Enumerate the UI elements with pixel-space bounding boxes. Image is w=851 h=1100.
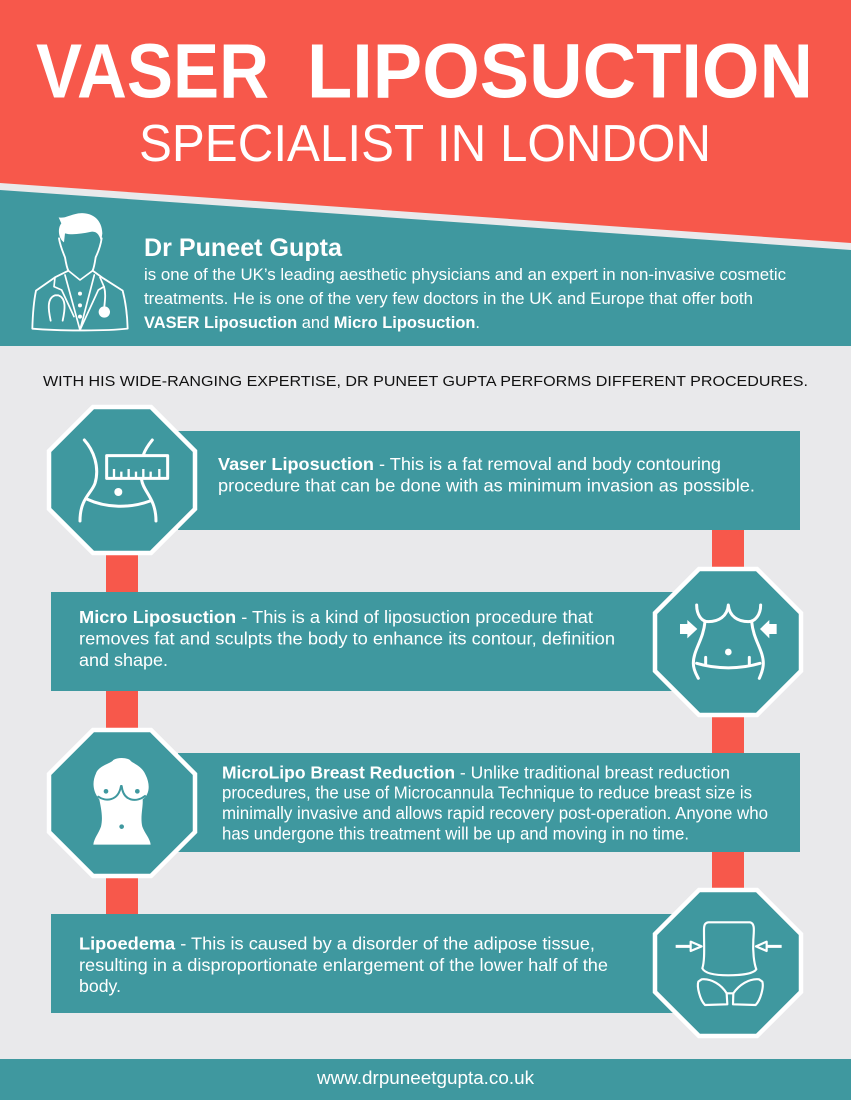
header banner [0,0,851,243]
icon: doctor [32,213,128,330]
text: Micro Liposuction: Micro Liposuction - This is a kind of liposuction procedure that [79,607,593,627]
text: MicroLipo Breast Reduction: MicroLipo Breast Reduction - Unlike traditional breast reduction [222,762,730,782]
icon: torso with arrows [655,569,801,715]
website address: www.drpuneetgupta.co.uk [316,1067,535,1088]
doctor name: Dr Puneet Gupta [144,234,343,262]
text: Micro Liposuction: and shape. [79,650,168,670]
title: VASER [36,28,269,114]
icon: waist with ruler [49,407,195,553]
subtitle: SPECIALIST IN LONDON [139,115,711,173]
panel: doctor introduction [0,190,851,346]
text: MicroLipo Breast Reduction [222,762,768,844]
text: Lipoedema: resulting in a disproportionate enlargement of the lower half of the [79,955,608,975]
doctor description: treatments. He is one of the very few doctors in the UK and Europe that offer both [144,290,753,308]
text: Lipoedema [79,934,608,996]
doctor description: is one of the UK’s leading aesthetic physicians and an expert in non-invasive cosmetic [144,266,786,284]
panel: Lipoedema [51,890,801,1036]
doctor description [144,266,786,332]
intro statement: WITH HIS WIDE-RANGING EXPERTISE, DR PUNEET GUPTA PERFORMS DIFFERENT PROCEDURES. [43,373,808,390]
doctor description: VASER Liposuction and Micro Liposuction. [144,314,480,332]
text: Micro Liposuction: removes fat and sculpts the body to enhance its contour, definition [79,628,615,648]
text: MicroLipo Breast Reduction: minimally invasive and allows rapid recovery post-operation. Anyone who [222,803,768,823]
text: MicroLipo Breast Reduction: has undergone this treatment will be up and moving in no time. [222,824,689,844]
icon: female torso [49,730,195,876]
text: Vaser Liposuction: Vaser Liposuction - This is a fat removal and body contouring [218,454,721,474]
title [36,28,813,114]
text: Lipoedema: Lipoedema - This is caused by a disorder of the adipose tissue, [79,934,595,954]
title: LIPOSUCTION [307,28,813,114]
text: Micro Liposuction [79,607,615,670]
connectors [106,525,744,918]
text: Vaser Liposuction [218,454,755,496]
icon: lower body with arrows [655,890,801,1036]
footer [0,1059,851,1100]
text: MicroLipo Breast Reduction: procedures, the use of Microcannula Technique to reduce breast size is [222,782,752,802]
panel: Micro Liposuction [51,569,801,715]
panel: Vaser Liposuction [49,407,800,553]
text: Lipoedema: body. [79,976,121,996]
text: Vaser Liposuction: procedure that can be done with as minimum invasion as possible. [218,476,755,496]
panel: MicroLipo Breast Reduction [49,730,800,876]
